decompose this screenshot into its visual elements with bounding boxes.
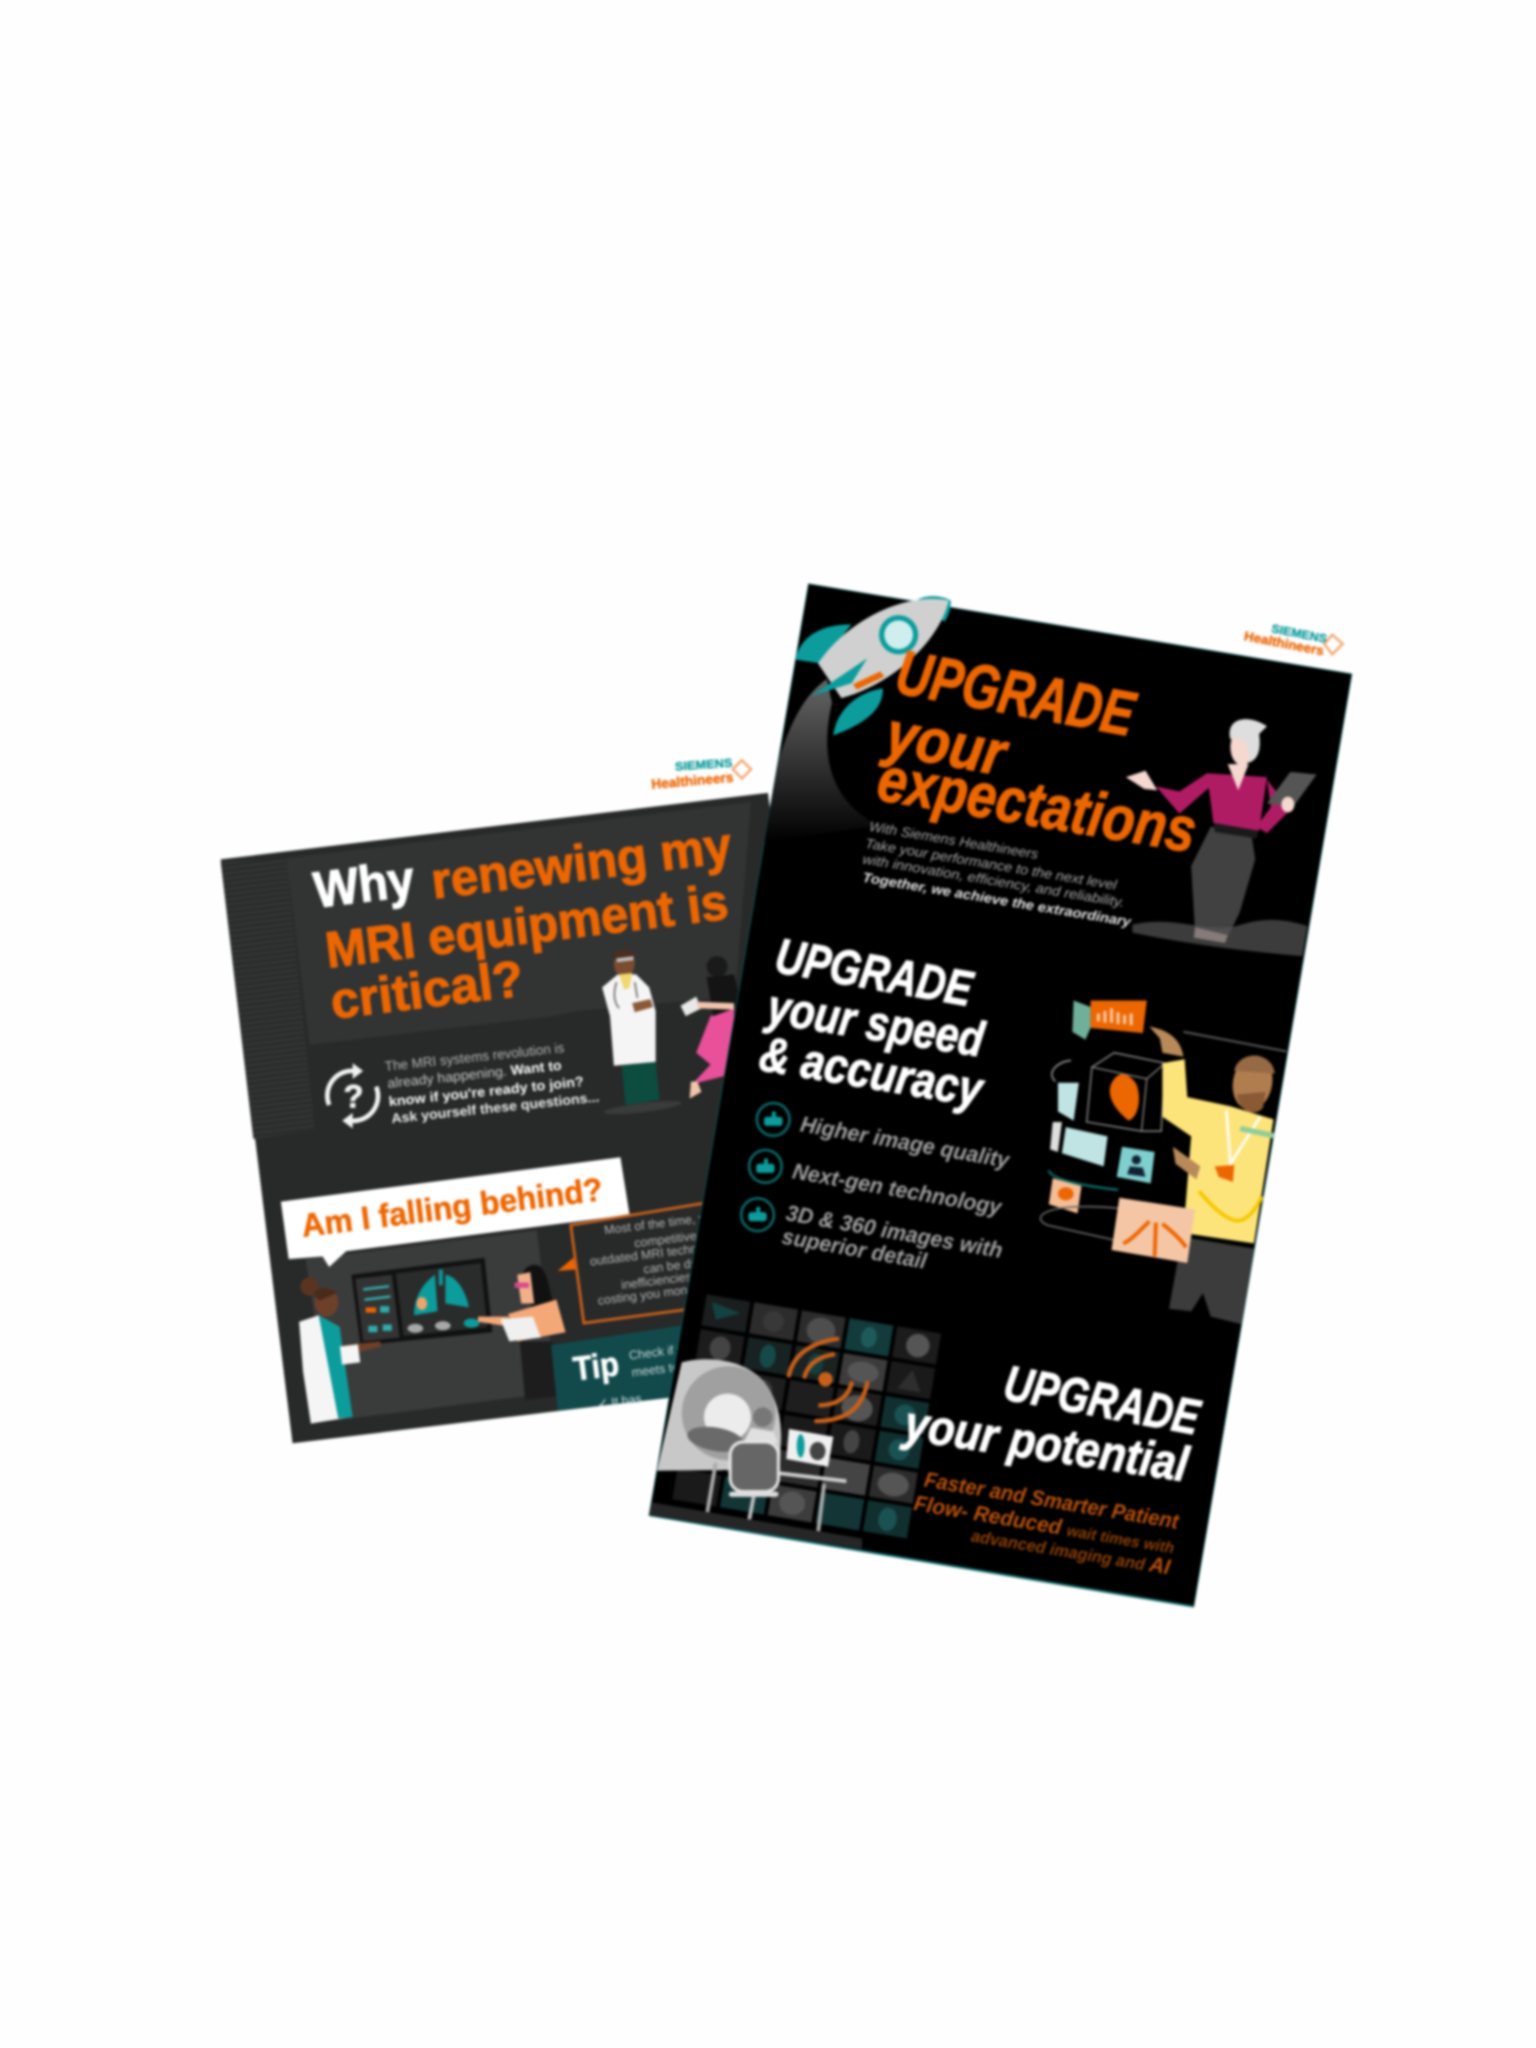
title: why renewing my MRI equipment is critical: Why — [310, 850, 418, 919]
heading: upgrade your speed and accuracy: your speed — [761, 978, 989, 1068]
striped side panel — [221, 858, 315, 1139]
heading: upgrade your potential — [898, 1355, 1205, 1493]
callout box with text: costing you money — [597, 1281, 702, 1308]
bullet list: benefits — [741, 1103, 1013, 1274]
intro text block: know if you're ready to join? — [388, 1074, 584, 1109]
intro text block: Ask yourself these questions... — [391, 1089, 600, 1126]
speech bubble: am I falling behind: Am I falling behind? — [299, 1170, 605, 1244]
icon: thumbs up three — [741, 1198, 774, 1231]
icon: thumbs up two — [749, 1150, 782, 1183]
heading: upgrade your potential: UPGRADE — [1000, 1355, 1205, 1446]
icon: thumbs up one — [757, 1103, 790, 1136]
text block: faster and smarter patient flow: Faster and Smarter Patient — [923, 1467, 1181, 1534]
panel: left page why renew — [221, 757, 840, 1443]
title: upgrade your expectations — [873, 637, 1201, 866]
intro text block: already happening. Want to — [387, 1058, 562, 1091]
heading: upgrade your speed and accuracy — [756, 927, 989, 1118]
callout box with text — [558, 1203, 733, 1323]
heading: upgrade your speed and accuracy: & accuracy — [756, 1025, 989, 1118]
logo: left page: Healthineers — [651, 770, 734, 792]
illustration: male doctor — [602, 950, 682, 1117]
logo: right page: SIEMENS — [1270, 622, 1328, 646]
tip panel: meets today — [631, 1357, 700, 1380]
heading: upgrade your potential: your potential — [898, 1394, 1193, 1493]
callout box with text: competitive — [633, 1229, 697, 1250]
bullet text: Next-gen technology — [791, 1158, 1005, 1220]
intro text block: with innovation, efficiency, and reliability. — [862, 852, 1126, 910]
bottom teal edge — [649, 1515, 1194, 1607]
tip panel: ✓ It has — [597, 1392, 642, 1411]
illustration: female doctor — [299, 1277, 381, 1424]
title: why renewing my MRI equipment is critical: critical? — [327, 950, 526, 1030]
logo: right page: Healthineers — [1243, 628, 1325, 658]
logo: left page — [651, 757, 751, 792]
illustration: MRI scanner with operator — [649, 1359, 862, 1549]
icon: orange signal arcs — [789, 1339, 867, 1421]
illustration: man with holographic panels — [1041, 1000, 1287, 1324]
intro text block: Take your performance to the next level — [864, 836, 1119, 893]
text block: faster and smarter patient flow: advanced imaging and AI — [970, 1521, 1173, 1580]
intro text block — [384, 1040, 600, 1126]
illustration: woman with tablet — [478, 1265, 566, 1400]
title: upgrade your expectations: UPGRADE — [891, 637, 1142, 750]
tip panel: Check if your — [628, 1340, 702, 1363]
icon: rocket — [795, 574, 965, 735]
icon: question with cycle arrows: ? — [344, 1078, 363, 1115]
lower lighter panel — [306, 1230, 556, 1421]
tip panel — [551, 1322, 705, 1411]
heading: upgrade your speed and accuracy: UPGRADE — [771, 927, 978, 1017]
bullet text: 3D & 360 images with — [784, 1200, 1005, 1263]
callout box with text: outdated MRI technology — [589, 1238, 728, 1269]
intro text block — [862, 819, 1133, 930]
logo: right page — [1243, 622, 1343, 658]
bullet text: superior detail — [780, 1224, 929, 1274]
intro text block: With Siemens Healthineers — [868, 819, 1039, 862]
panel: right page upgrade — [649, 574, 1352, 1607]
intro text block: Together, we achieve the extraordinary — [862, 870, 1133, 930]
speech bubble: am I falling behind — [281, 1157, 630, 1267]
icon: question with cycle arrows — [327, 1063, 378, 1128]
intro text block: The MRI systems revolution is — [384, 1040, 565, 1074]
monitor with lungs — [351, 1258, 492, 1345]
title: why renewing my MRI equipment is critical: renewing my — [428, 816, 735, 910]
title: upgrade your expectations: your — [878, 698, 1014, 790]
logo: left page: SIEMENS — [675, 757, 733, 774]
text block: faster and smarter patient flow — [912, 1467, 1181, 1580]
illustration: woman with clipboard and pink trousers — [680, 956, 742, 1098]
callout box with text: Most of the time, your — [603, 1209, 723, 1237]
rocket trail — [760, 679, 878, 842]
tip panel: Tip — [571, 1345, 621, 1389]
image grid — [672, 1294, 941, 1538]
right page background — [649, 584, 1352, 1607]
title: why renewing my MRI equipment is critical — [310, 816, 735, 1030]
callout box with text: can be dragging — [643, 1252, 733, 1276]
bullet text: Higher image quality — [798, 1111, 1013, 1173]
text block: faster and smarter patient flow: Flow- Reduced wait times with — [912, 1490, 1176, 1558]
header lighter panel — [286, 802, 751, 1045]
illustration: businesswoman with tablet — [1126, 719, 1317, 956]
left page background — [221, 793, 840, 1443]
title: upgrade your expectations: expectations — [873, 744, 1201, 866]
callout box with text: inefficiencies — [620, 1270, 692, 1292]
title: why renewing my MRI equipment is critical: MRI equipment is — [322, 873, 731, 979]
bullet text — [780, 1111, 1013, 1274]
